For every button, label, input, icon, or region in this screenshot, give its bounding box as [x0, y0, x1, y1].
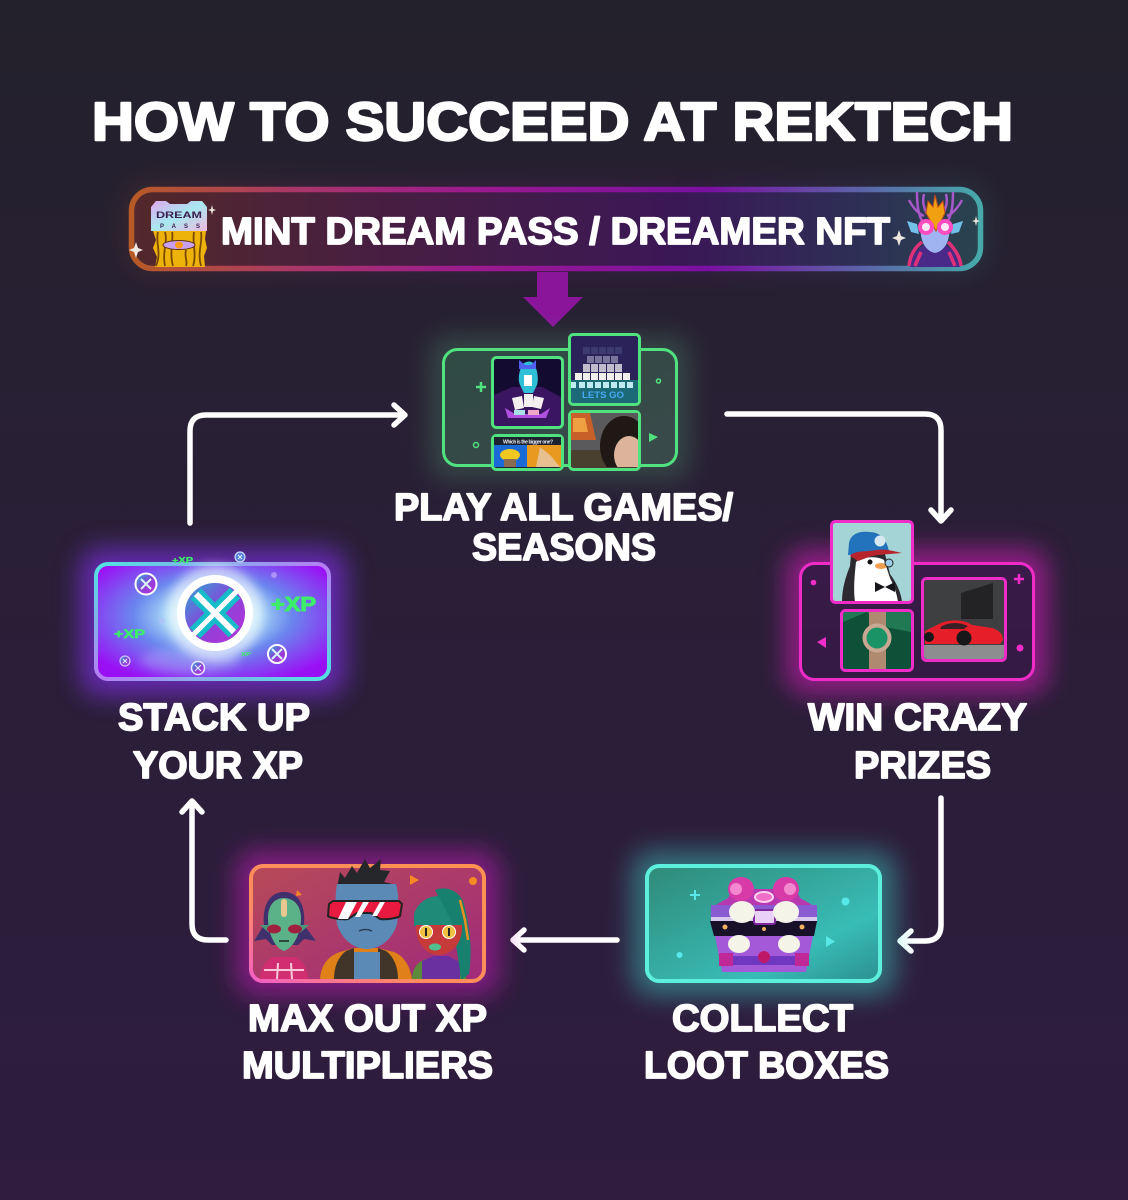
label: stack up your XP: STACK UP	[118, 697, 310, 739]
panel: loot boxes	[632, 851, 896, 996]
title: HOW TO SUCCEED AT REKTECH	[92, 92, 1013, 152]
character: green alien	[254, 892, 316, 979]
+XP labels: +XP	[271, 594, 316, 616]
card: word game: LETS GO	[582, 390, 624, 400]
card: quiz	[492, 436, 562, 470]
label: play all games: SEASONS	[472, 527, 656, 569]
arrow: loot boxes to multipliers	[513, 930, 617, 950]
icon: dream pass: DREAM	[156, 210, 202, 221]
label: play all games: PLAY ALL GAMES/	[394, 487, 733, 529]
+XP labels: +XP	[172, 556, 194, 565]
label: stack up your XP	[118, 697, 310, 787]
soft light	[140, 646, 240, 674]
card: watch	[842, 610, 912, 670]
panel: prizes	[786, 522, 1048, 694]
card: poker game	[492, 358, 562, 428]
arrow: down from banner	[523, 272, 583, 327]
label: max out XP multipliers: MAX OUT XP	[248, 998, 487, 1040]
icon: treasure chest	[710, 877, 817, 972]
card: quiz: Which is the bigger one?	[503, 440, 553, 446]
label: win crazy prizes	[808, 697, 1027, 787]
banner: mint dream pass / dreamer NFT	[126, 184, 986, 274]
arrow: games to prizes	[727, 414, 951, 521]
label: play all games	[394, 487, 733, 569]
banner text: MINT DREAM PASS / DREAMER NFT	[221, 211, 890, 253]
loot icons	[690, 890, 700, 900]
label: collect loot boxes: LOOT BOXES	[644, 1045, 889, 1087]
sparkles	[129, 205, 980, 258]
small coins	[120, 552, 286, 674]
icon: dream pass	[151, 201, 207, 267]
icon: dreamer character	[907, 192, 963, 267]
label: max out XP multipliers	[242, 998, 493, 1087]
game icons	[476, 382, 486, 392]
panel: XP multipliers	[236, 851, 500, 996]
label: win crazy prizes: WIN CRAZY	[808, 697, 1027, 739]
card: burning house selfie	[568, 410, 641, 471]
card: penguin	[832, 522, 912, 602]
label: collect loot boxes: COLLECT	[672, 998, 853, 1040]
arrow: stack up XP to games	[190, 405, 405, 523]
prize icons	[811, 580, 816, 585]
XP coin	[167, 565, 263, 661]
character: green hair	[412, 888, 471, 980]
arrow: multipliers to stack up XP	[182, 801, 226, 940]
label: max out XP multipliers: MULTIPLIERS	[242, 1045, 493, 1087]
+XP labels	[114, 556, 316, 658]
panel: games	[430, 334, 690, 479]
icon: dream pass: PASS	[160, 224, 200, 230]
multiplier icons	[410, 875, 419, 885]
card: red car	[922, 578, 1006, 660]
+XP labels: +XP	[114, 627, 145, 641]
arrow: prizes to loot boxes	[900, 798, 941, 951]
label: win crazy prizes: PRIZES	[854, 745, 991, 787]
+XP labels: XP	[241, 652, 252, 658]
label: collect loot boxes	[644, 998, 889, 1087]
card: word game	[570, 334, 640, 404]
character: blue visor	[320, 859, 412, 979]
label: stack up your XP: YOUR XP	[133, 745, 303, 787]
panel: stack up XP	[80, 548, 346, 696]
